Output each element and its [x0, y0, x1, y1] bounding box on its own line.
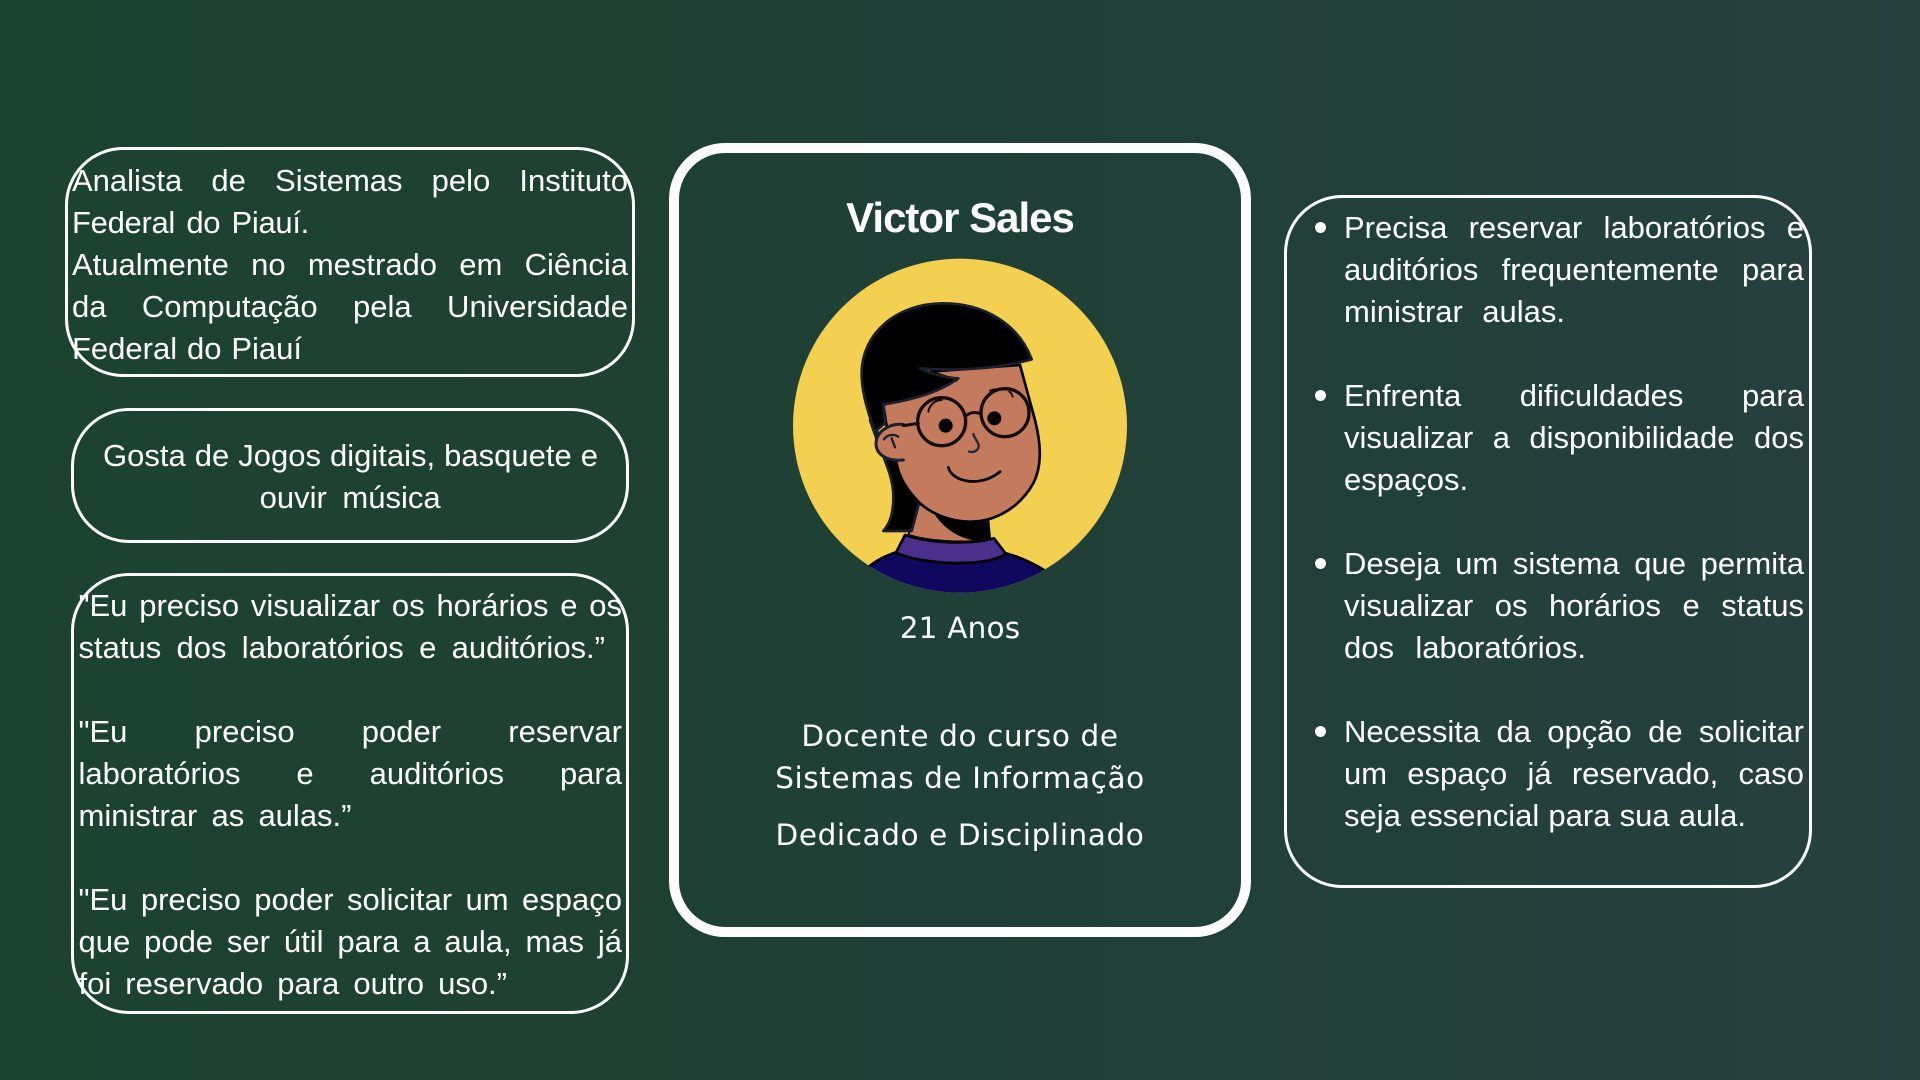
panel: formação acadêmica: Atualmente no mestrado em Ciência: [72, 247, 628, 282]
panel: interesses: [71, 408, 629, 543]
heading: nome: Victor Sales: [846, 194, 1074, 241]
panel: citações: "Eu preciso poder solicitar um espaço: [78, 882, 622, 917]
panel: citações: "Eu preciso poder reservar: [78, 714, 622, 749]
panel: citações: laboratórios e auditórios para: [78, 756, 622, 791]
text: necessidade 1 linha 3: ministrar aulas.: [1344, 294, 1565, 329]
panel: formação acadêmica: [65, 147, 635, 377]
bullet 4: [1314, 726, 1326, 737]
text: necessidade 1: Precisa reservar laboratórios e: [1344, 210, 1804, 245]
icon: avatar: [793, 258, 1127, 593]
panel: interesses: ouvir música: [260, 480, 441, 515]
panel: citações: "Eu preciso visualizar os horários e os: [78, 588, 622, 623]
text: necessidade 4 linha 3: seja essencial para sua aula.: [1344, 798, 1746, 833]
text: traços: Dedicado e Disciplinado: [776, 818, 1144, 852]
text: necessidade 3: Deseja um sistema que permita: [1344, 546, 1804, 581]
text: necessidade 2 linha 2: visualizar a disponibilidade dos: [1344, 420, 1804, 455]
text: idade: 21 Anos: [900, 611, 1020, 645]
panel: citações: status dos laboratórios e auditórios.”: [78, 630, 605, 665]
panel: citações: ministrar as aulas.”: [78, 798, 352, 833]
panel: perfil central: [669, 143, 1251, 937]
panel: interesses: Gosta de Jogos digitais, basquete e: [103, 438, 598, 473]
text: necessidade 3 linha 2: visualizar os horários e status: [1344, 588, 1804, 623]
panel: citações: foi reservado para outro uso.”: [78, 966, 507, 1001]
panel: formação acadêmica: Analista de Sistemas pelo Instituto: [72, 163, 628, 198]
panel: formação acadêmica: da Computação pela Universidade: [72, 289, 628, 324]
text: curso: Sistemas de Informação: [775, 761, 1145, 795]
panel: formação acadêmica: Federal do Piauí: [72, 331, 302, 366]
text: necessidade 4 linha 2: um espaço já reservado, caso: [1344, 756, 1804, 791]
panel: citações: que pode ser útil para a aula, mas já: [78, 924, 622, 959]
bullet 3: [1314, 558, 1326, 569]
panel: citações: [71, 573, 629, 1014]
text: ocupação: Docente do curso de: [801, 719, 1119, 753]
bullet 1: [1314, 222, 1326, 233]
text: necessidade 2: Enfrenta dificuldades para: [1344, 378, 1804, 413]
panel: necessidades: [1284, 195, 1812, 888]
text: necessidade 4: Necessita da opção de solicitar: [1344, 714, 1804, 749]
panel: formação acadêmica: Federal do Piauí.: [72, 205, 309, 240]
text: necessidade 2 linha 3: espaços.: [1344, 462, 1468, 497]
text: necessidade 3 linha 3: dos laboratórios.: [1344, 630, 1586, 665]
text: necessidade 1 linha 2: auditórios frequentemente para: [1344, 252, 1804, 287]
bullet 2: [1314, 390, 1326, 401]
